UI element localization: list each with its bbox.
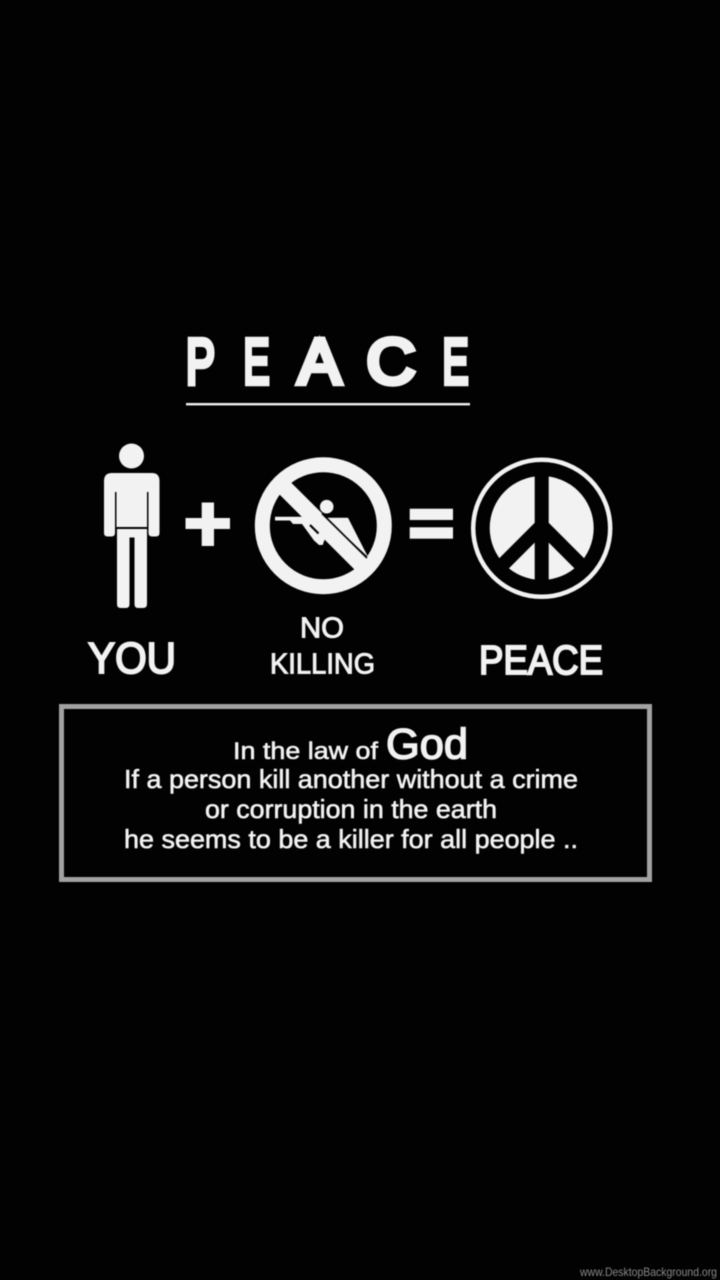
icon: no killing sign: [262, 465, 384, 587]
slash edge line: [322, 514, 367, 558]
title: E: [442, 325, 468, 397]
callout text: he seems to be a killer for all people ..: [124, 824, 578, 854]
title: E: [244, 325, 270, 397]
callout text: or corruption in the earth: [205, 794, 497, 824]
callout text: [124, 720, 578, 854]
gun edge line: [310, 525, 318, 534]
label: you: YOU: [88, 634, 176, 683]
label: no killing: NO: [300, 612, 344, 644]
title underline: [186, 403, 470, 405]
callout text: In the law of: [233, 738, 378, 765]
slash: [273, 476, 375, 575]
callout text: God: [386, 720, 468, 768]
shooter head: [320, 500, 334, 514]
title: P: [186, 325, 215, 397]
gun: [275, 517, 325, 545]
icon: person: [104, 444, 160, 608]
title: [186, 325, 468, 397]
callout text: If a person kill another without a crime: [124, 764, 578, 794]
label: no killing: KILLING: [270, 648, 375, 680]
callout box: [62, 706, 650, 880]
title: C: [366, 325, 416, 397]
shooter body: [326, 518, 368, 557]
label: no killing: [270, 612, 375, 680]
icon: peace symbol: [473, 460, 610, 597]
label: peace: PEACE: [479, 637, 603, 683]
icon: plus: [186, 502, 230, 546]
icon: equals: [410, 509, 453, 539]
title: A: [298, 325, 341, 397]
